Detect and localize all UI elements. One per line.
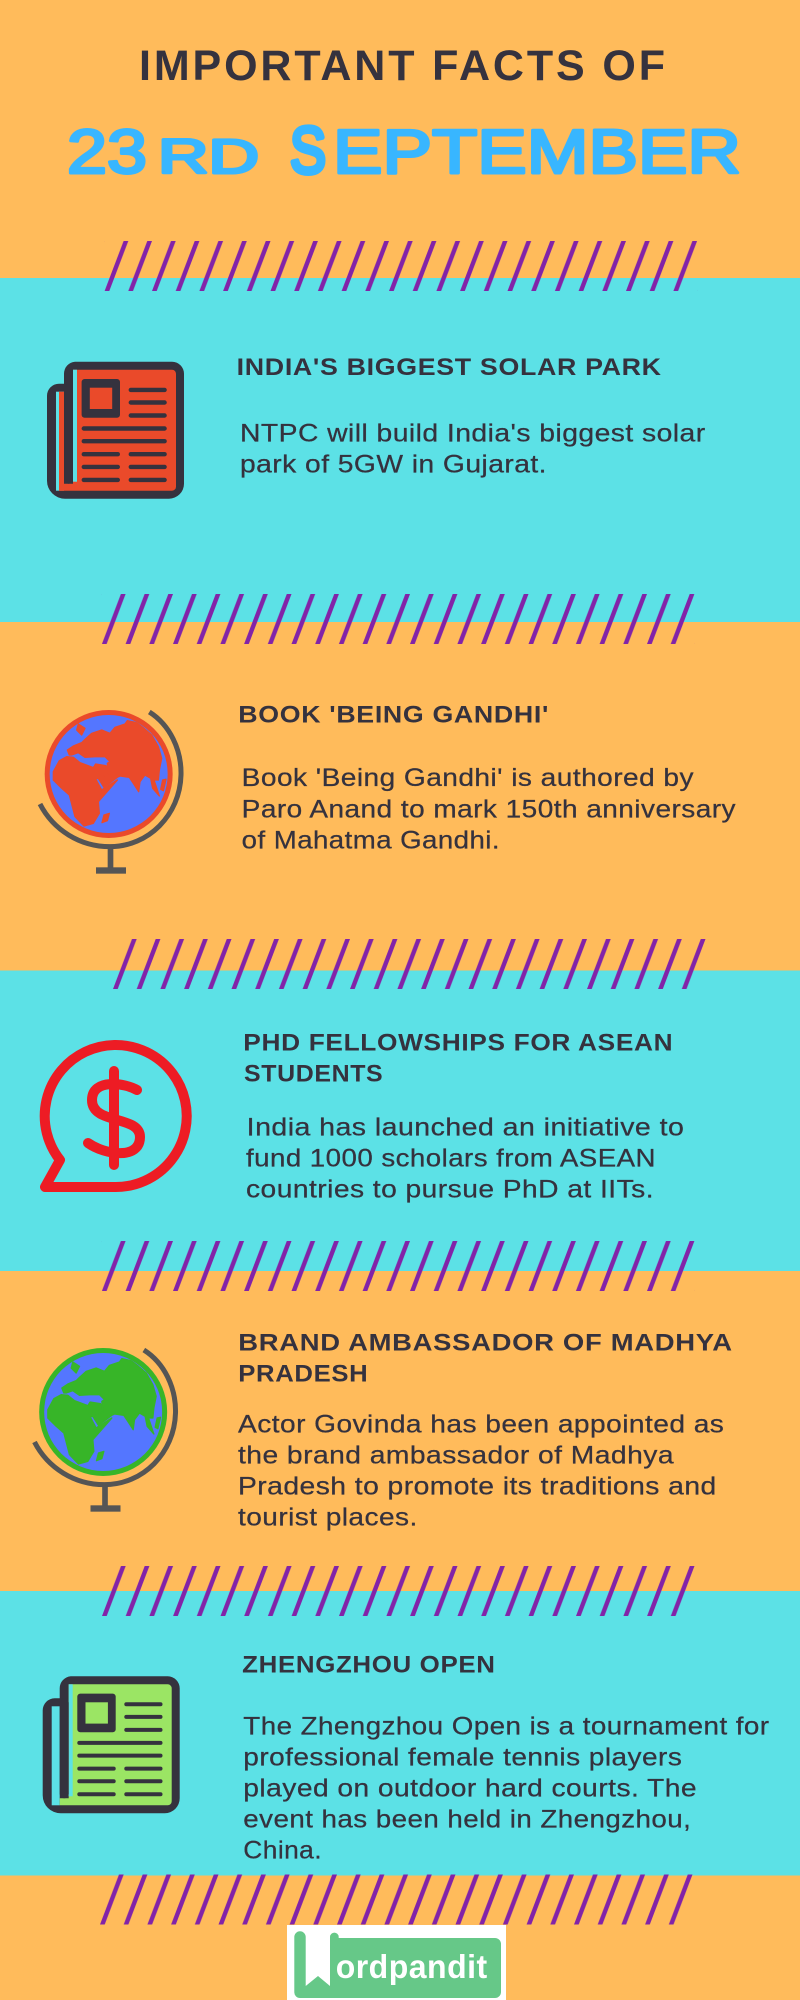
- body text: [240, 420, 706, 478]
- body text: [246, 1114, 684, 1204]
- body text: Pradesh to promote its traditions and: [238, 1473, 717, 1501]
- body text: event has been held in Zhengzhou,: [243, 1805, 691, 1833]
- body text: fund 1000 scholars from ASEAN: [246, 1145, 656, 1173]
- body text: China.: [243, 1836, 322, 1864]
- body text: NTPC will build India's biggest solar: [240, 420, 706, 448]
- title line: important facts of: IMPORTANT FACTS OF: [139, 42, 665, 90]
- body text: the brand ambassador of Madhya: [238, 1441, 674, 1469]
- body text: park of 5GW in Gujarat.: [240, 450, 547, 478]
- heading: [238, 1330, 733, 1388]
- divider stripes 1: [105, 241, 697, 291]
- panel: phd fellowships: [0, 970, 800, 1271]
- heading: [243, 1030, 673, 1088]
- title line: date: 23: [67, 118, 147, 187]
- heading: BOOK 'BEING GANDHI': [238, 702, 549, 729]
- icon: newspaper: [47, 362, 184, 499]
- panel: brand ambassador: [32, 1334, 732, 1531]
- title line: date: EPTEMBER: [333, 118, 741, 187]
- divider stripes 4: [102, 1241, 694, 1291]
- body text: [243, 1713, 770, 1864]
- divider stripes 2: [102, 594, 694, 644]
- body text: played on outdoor hard courts. The: [243, 1774, 697, 1802]
- divider stripes 5: [102, 1566, 694, 1616]
- body text: [238, 1411, 724, 1532]
- title line: date: RD: [158, 131, 259, 184]
- body text: Paro Anand to mark 150th anniversary: [242, 795, 736, 823]
- logo: wordpandit: ordpandit: [336, 1948, 488, 1985]
- heading: INDIA'S BIGGEST SOLAR PARK: [237, 354, 662, 381]
- body text: tourist places.: [238, 1504, 418, 1532]
- heading: ZHENGZHOU OPEN: [242, 1651, 496, 1678]
- panel: being gandhi: [38, 706, 736, 874]
- body text: India has launched an initiative to: [247, 1114, 684, 1142]
- icon: green globe: [34, 1348, 176, 1512]
- body text: professional female tennis players: [243, 1743, 682, 1771]
- body text: Book 'Being Gandhi' is authored by: [242, 764, 694, 792]
- body text: [242, 764, 736, 854]
- icon: newspaper green: [43, 1676, 180, 1813]
- title: [67, 42, 741, 187]
- heading: BRAND AMBASSADOR OF MADHYA: [238, 1330, 733, 1357]
- icon: red globe: [40, 710, 181, 874]
- divider stripes 6: [100, 1874, 692, 1924]
- body text: Actor Govinda has been appointed as: [238, 1411, 724, 1439]
- logo: wordpandit: [287, 1925, 506, 2000]
- title line: date: S: [290, 113, 326, 187]
- panel: zhengzhou open: [0, 1591, 800, 1876]
- divider stripes 3: [113, 939, 706, 989]
- body text: of Mahatma Gandhi.: [242, 826, 500, 854]
- icon: dollar speech bubble: [45, 1045, 187, 1187]
- heading: STUDENTS: [244, 1061, 383, 1088]
- body text: countries to pursue PhD at IITs.: [246, 1176, 654, 1204]
- panel: solar park: [0, 278, 800, 622]
- heading: PRADESH: [238, 1361, 368, 1388]
- heading: PHD FELLOWSHIPS FOR ASEAN: [243, 1030, 673, 1057]
- body text: The Zhengzhou Open is a tournament for: [243, 1713, 770, 1741]
